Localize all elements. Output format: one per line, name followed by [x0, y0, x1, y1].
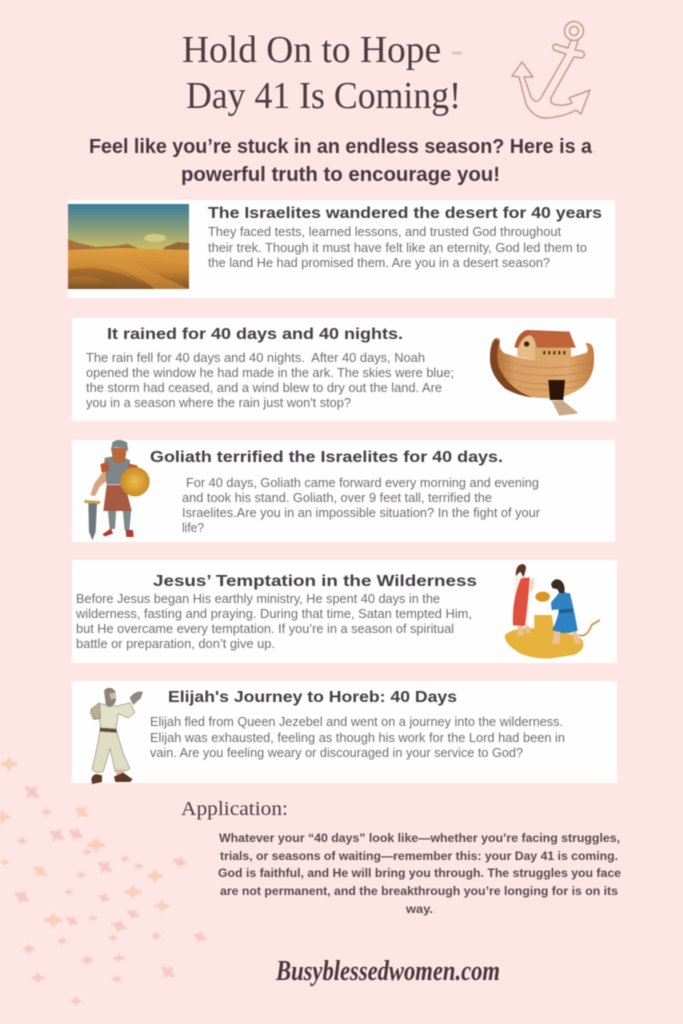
- application text: way.: [405, 904, 433, 916]
- subtitle: powerful truth to encourage you!: [181, 164, 500, 186]
- title: [182, 29, 463, 117]
- icon: Elijah prophet: [90, 688, 143, 784]
- website credit: Busyblessedwomen.com: [275, 955, 500, 987]
- body text: Elijah was exhausted, feeling as though his work for the Lord had been in: [150, 731, 565, 745]
- panel: Elijah's journey: [72, 681, 617, 784]
- body text: wilderness, fasting and praying. During that time, Satan tempted Him,: [75, 607, 472, 621]
- body text: you in a season where the rain just won't stop?: [86, 396, 351, 410]
- application text: Whatever your “40 days” look like—whether you’re facing struggles,: [219, 833, 620, 845]
- body text: the land He had promised them. Are you in a desert season?: [208, 256, 550, 270]
- heading: It rained for 40 days and 40 nights.: [107, 326, 403, 343]
- body text: [75, 592, 472, 651]
- heading: Elijah's Journey to Horeb: 40 Days: [168, 689, 457, 706]
- body text: Before Jesus began His earthly ministry, He spent 40 days in the: [76, 592, 440, 606]
- application text: trials, or seasons of waiting—remember this: your Day 41 is coming.: [220, 851, 618, 863]
- body text: but He overcame every temptation. If you’re in a season of spiritual: [76, 622, 454, 636]
- icon: desert landscape: [68, 204, 189, 289]
- body text: their trek. Though it must have felt like an eternity, God led them to: [208, 241, 587, 255]
- application text: [218, 833, 621, 916]
- body text: the storm had ceased, and a wind blew to dry out the land. Are: [86, 381, 442, 395]
- heading: application: Application:: [181, 798, 288, 820]
- body text: [182, 476, 540, 535]
- subtitle: [89, 136, 593, 186]
- title: Hold On to Hope -: [182, 29, 463, 71]
- title: Day 41 Is Coming!: [186, 75, 461, 117]
- icon: anchor: [512, 22, 590, 118]
- body text: For 40 days, Goliath came forward every morning and evening: [186, 476, 539, 490]
- panel: rain for 40 days: [72, 318, 616, 421]
- body text: vain. Are you feeling weary or discouraged in your service to God?: [150, 746, 523, 760]
- icon: Jesus tempted by Satan: [505, 564, 600, 658]
- panel: Goliath: [72, 440, 615, 542]
- application text: are not permanent, and the breakthrough you’re longing for is on its: [220, 886, 618, 898]
- heading: Jesus’ Temptation in the Wilderness: [153, 573, 477, 590]
- icon: Noah's ark: [490, 330, 594, 416]
- body text: Elijah fled from Queen Jezebel and went on a journey into the wilderness.: [150, 715, 563, 729]
- heading: The Israelites wandered the desert for 40 years: [208, 205, 602, 222]
- subtitle: Feel like you’re stuck in an endless season? Here is a: [89, 136, 593, 158]
- panel: Israelites in the desert: [68, 200, 615, 298]
- decorative star cluster: [0, 756, 208, 1006]
- body text: The rain fell for 40 days and 40 nights. After 40 days, Noah: [86, 351, 425, 365]
- heading: Goliath terrified the Israelites for 40 days.: [150, 449, 503, 466]
- icon: Goliath warrior: [84, 440, 150, 540]
- body text: life?: [182, 521, 204, 535]
- body text: Israelites.Are you in an impossible situation? In the fight of your: [182, 506, 540, 520]
- body text: battle or preparation, don’t give up.: [76, 637, 275, 651]
- body text: [150, 715, 565, 760]
- body text: [208, 225, 587, 270]
- body text: [86, 351, 454, 410]
- panel: Jesus' temptation: [72, 560, 617, 663]
- body text: opened the window he had made in the ark. The skies were blue;: [86, 366, 454, 380]
- body text: and took his stand. Goliath, over 9 feet tall, terrified the: [182, 491, 492, 505]
- body text: They faced tests, learned lessons, and trusted God throughout: [208, 225, 562, 239]
- application text: God is faithful, and He will bring you through. The struggles you face: [218, 868, 621, 880]
